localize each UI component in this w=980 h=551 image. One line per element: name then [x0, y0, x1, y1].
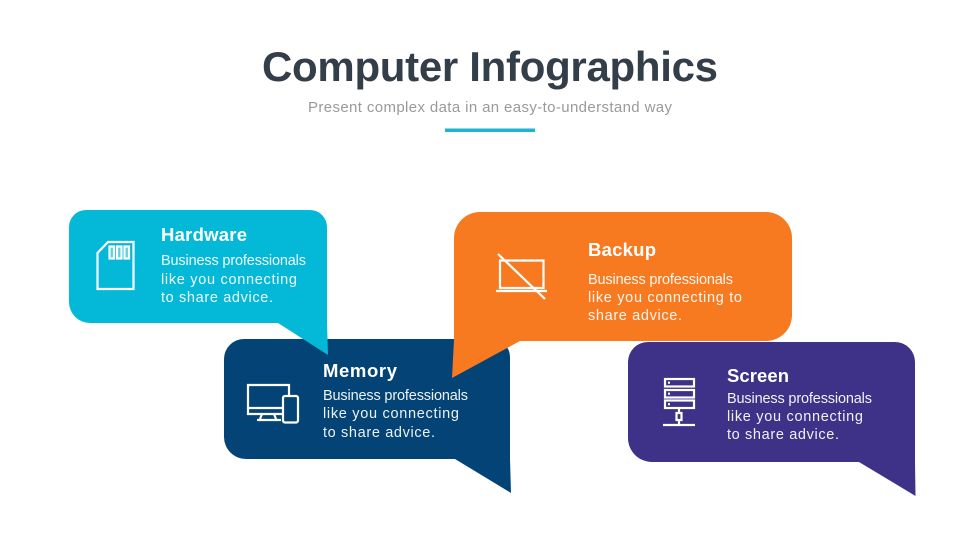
body text: hardware [161, 253, 306, 306]
subtitle: Present complex data in an easy-to-understand way [308, 99, 672, 116]
icon: crossed-out laptop [496, 254, 547, 299]
body text: memory: Business professionals [323, 388, 468, 404]
heading: hardware: Hardware [161, 224, 247, 245]
body text: backup: Business professionals [588, 272, 733, 288]
panel: hardware [69, 210, 328, 355]
body text: memory: like you connecting [323, 406, 459, 422]
body text: screen: Business professionals [727, 391, 872, 407]
panel: memory [224, 339, 511, 493]
title: Computer Infographics [262, 43, 718, 90]
panel: backup [452, 212, 792, 378]
speech bubble: memory [224, 339, 511, 493]
body text: hardware: like you connecting [161, 272, 297, 288]
panel: screen [628, 342, 916, 496]
speech bubble: backup [452, 212, 792, 378]
body text: screen: to share advice. [727, 427, 839, 443]
body text: memory [323, 388, 468, 441]
icon: monitor and phone [248, 385, 298, 422]
body text: hardware: Business professionals [161, 253, 306, 269]
heading: memory: Memory [323, 360, 398, 381]
title underline [445, 128, 535, 132]
body text: backup [588, 272, 742, 324]
icon: server rack [663, 379, 695, 425]
body text: screen [727, 391, 872, 443]
header [262, 43, 718, 132]
heading: screen: Screen [727, 365, 789, 386]
heading: backup: Backup [588, 239, 656, 260]
body text: hardware: to share advice. [161, 290, 273, 306]
icon: memory card [98, 242, 134, 289]
body text: backup: like you connecting to [588, 290, 742, 306]
body text: backup: share advice. [588, 308, 682, 324]
speech bubble: screen [628, 342, 916, 496]
body text: memory: to share advice. [323, 425, 435, 441]
body text: screen: like you connecting [727, 409, 863, 425]
speech bubble: hardware [69, 210, 328, 355]
